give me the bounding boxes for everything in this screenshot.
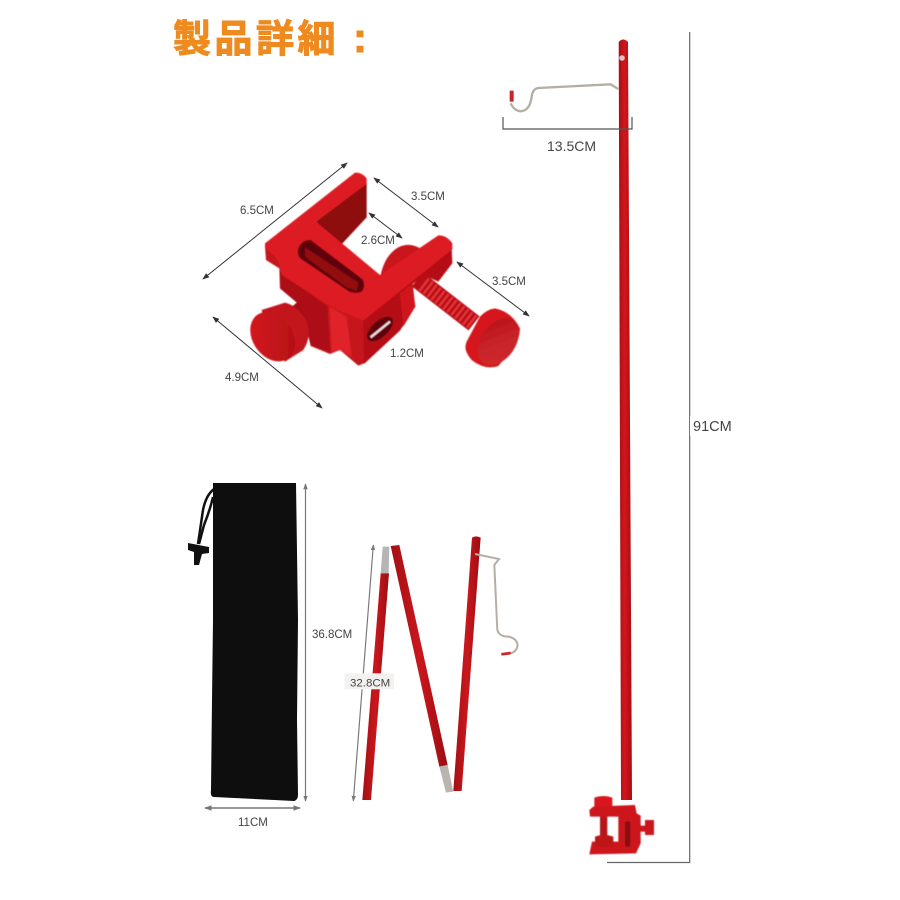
black bag [211, 483, 298, 801]
label: 6.5CM: 6.5CM [240, 205, 274, 217]
dimension arrow [353, 545, 373, 801]
height line: 91CM [607, 32, 690, 862]
clamp close-up with dimensions [203, 163, 529, 408]
wire hook [511, 84, 618, 111]
top face [265, 173, 452, 321]
hole [363, 312, 397, 346]
label: 1.2CM: 1.2CM [390, 348, 424, 360]
screw behind left knob [290, 298, 322, 330]
threaded screw [417, 279, 474, 323]
folded pole sections with dimension [345, 536, 518, 801]
pole 2 [391, 545, 453, 793]
left side face [265, 246, 364, 366]
storage bag with dimensions [188, 483, 352, 829]
label: 13.5CM: 13.5CM [547, 138, 596, 154]
arrow: 4.9CM [213, 317, 322, 408]
arrow: 3.5CM top [374, 178, 438, 227]
right knob [465, 308, 520, 367]
inner face of upper arm [316, 183, 367, 246]
slot [298, 240, 364, 293]
label background and text: 32.8CM: 32.8CM [350, 678, 390, 690]
front face [363, 247, 452, 364]
label: 3.5CM top: 3.5CM [411, 191, 445, 203]
clamp body [241, 173, 527, 373]
label: 3.5CM right: 3.5CM [492, 276, 526, 288]
arrow: 3.5CM right [457, 262, 529, 316]
label: 36.8CM: 36.8CM [312, 629, 352, 641]
label: 2.6CM: 2.6CM [361, 235, 395, 247]
label background and text: 32.8CM [345, 673, 394, 690]
arrow: 6.5CM [203, 163, 347, 279]
left knob [262, 303, 309, 362]
main red rod [619, 40, 632, 800]
clamp at base [589, 796, 654, 854]
title: 製品詳細 [173, 19, 339, 61]
rod pin [619, 55, 625, 61]
label: 4.9CM: 4.9CM [225, 372, 259, 384]
bracket: 13.5CM [503, 117, 632, 129]
title: : [353, 14, 370, 61]
drawstring and toggle [188, 489, 214, 565]
far knob [381, 245, 422, 282]
pole 3 with hook [453, 536, 518, 791]
full lantern stand with dimensions [503, 32, 736, 862]
pole 1 [362, 547, 389, 800]
arrow: bag height [304, 484, 306, 801]
label: 11CM: 11CM [238, 817, 268, 829]
label: 91CM: 91CM [693, 419, 732, 435]
arrow: 2.6CM [369, 213, 402, 238]
arrow: bag width [205, 807, 300, 809]
label: 91CM [690, 416, 736, 436]
